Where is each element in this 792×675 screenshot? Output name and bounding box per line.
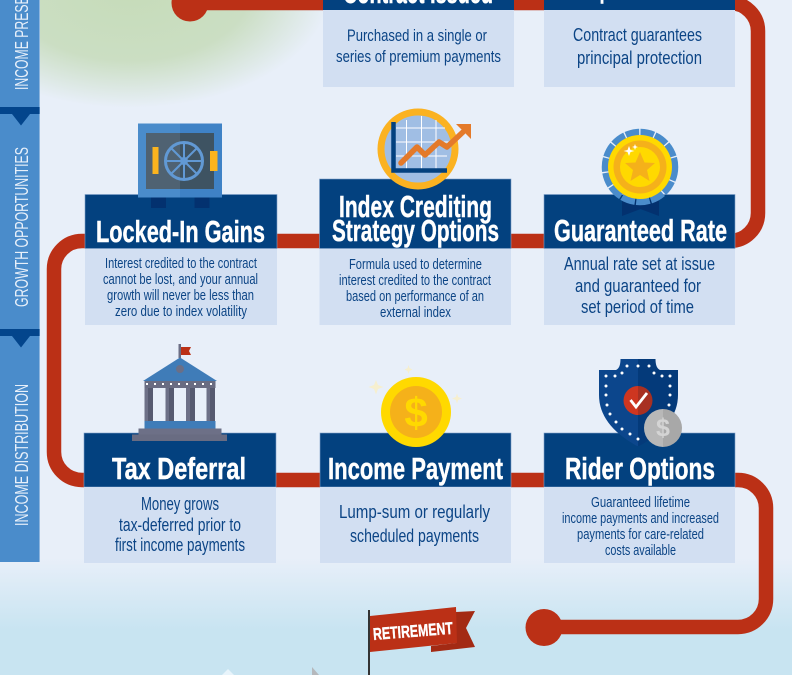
card: locked-in gains: cannot be lost, and your annual <box>103 271 258 288</box>
card: index crediting strategy options: Index Crediting <box>339 189 492 224</box>
icon: shield and coin: $ <box>656 414 670 442</box>
card: rider options: payments for care-related <box>577 526 704 543</box>
icon: safe <box>138 124 222 208</box>
card: contract issued: series of premium payments <box>336 48 501 66</box>
card: locked-in gains: growth will never be less than <box>107 287 254 304</box>
card: index crediting strategy options: external index <box>380 304 451 321</box>
mountain peaks <box>222 667 319 675</box>
card: tax deferral: first income payments <box>115 535 245 555</box>
retirement flag <box>368 607 475 675</box>
green hill glow <box>0 0 330 108</box>
card: rider options: income payments and increased <box>562 510 719 527</box>
icon: gold coin: $ <box>404 389 428 436</box>
card: income payment: Income Payment <box>328 451 503 486</box>
card: index crediting strategy options: Strategy Options <box>332 213 499 248</box>
card: locked-in gains: Locked-In Gains <box>96 214 265 249</box>
card: guaranteed rate: Annual rate set at issue <box>564 254 715 274</box>
card: principal protection: Contract guarantees <box>573 25 702 45</box>
card: income payment: scheduled payments <box>350 526 479 546</box>
card: locked-in gains: zero due to index volatility <box>115 303 247 320</box>
card: rider options <box>544 433 735 563</box>
card: principal protection <box>544 0 735 87</box>
card: rider options: Rider Options <box>565 451 715 486</box>
card: tax deferral: tax-deferred prior to <box>119 515 241 535</box>
card: guaranteed rate <box>544 194 735 325</box>
card: income payment <box>320 433 511 563</box>
card: locked-in gains <box>85 194 277 325</box>
card: income payment: Lump-sum or regularly <box>339 502 490 522</box>
card: tax deferral: Money grows <box>141 494 219 514</box>
card: contract issued: Purchased in a single or <box>347 27 487 45</box>
card: guaranteed rate: set period of time <box>581 297 694 317</box>
icon: growth chart <box>381 112 471 186</box>
retirement flag: RETIREMENT <box>372 619 454 644</box>
card: index crediting strategy options: interest credited to the contract <box>339 272 492 289</box>
icon: shield and coin <box>599 359 682 447</box>
icon: medal <box>606 132 674 216</box>
card: index crediting strategy options: based on performance of an <box>346 288 484 305</box>
card: principal protection: principal protection <box>577 48 702 68</box>
side bar: phases <box>0 0 40 562</box>
label: growth opportunities: GROWTH OPPORTUNITIES <box>11 147 32 307</box>
card: tax deferral: Tax Deferral <box>112 451 246 486</box>
card: tax deferral <box>84 433 276 563</box>
card: index crediting strategy options <box>320 179 511 325</box>
icon: gold coin <box>368 365 462 447</box>
card: guaranteed rate: and guaranteed for <box>575 276 701 296</box>
icon: bank building <box>132 344 227 441</box>
label: income distribution: INCOME DISTRIBUTION <box>11 384 32 526</box>
card: locked-in gains: Interest credited to the contract <box>105 255 258 272</box>
card: contract issued <box>323 0 514 87</box>
card: rider options: costs available <box>605 542 676 559</box>
card: index crediting strategy options: Formula used to determine <box>349 256 482 273</box>
card: rider options: Guaranteed lifetime <box>591 494 690 511</box>
